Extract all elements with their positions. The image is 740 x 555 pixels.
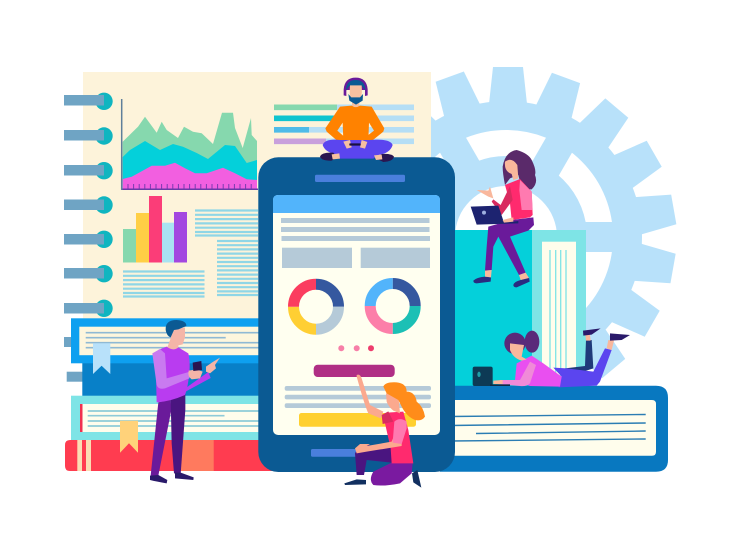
pagination dots [338, 345, 374, 351]
phone speaker [315, 175, 405, 182]
book: top left stack, blue [64, 318, 272, 396]
laptop [473, 367, 510, 386]
icon: gear [350, 67, 677, 404]
book: middle left stack, teal [71, 396, 271, 441]
lower text lines [285, 386, 431, 408]
spiral binding rings [64, 93, 113, 317]
purple button [314, 365, 395, 377]
book: large blue book, right [440, 386, 668, 472]
icon: yellow bookmark [120, 421, 138, 453]
figure: meditating man with headphones [320, 78, 394, 162]
phone screen [273, 195, 440, 435]
panel: notebook page [83, 72, 431, 332]
figure: woman lying on book [473, 328, 630, 387]
yellow button [299, 413, 416, 427]
phone home bar [311, 449, 371, 457]
figure: woman sitting with laptop [471, 150, 536, 287]
icon: blue bookmark [93, 343, 110, 374]
screen image blocks [282, 248, 430, 268]
text lines: lower right of notebook [217, 241, 258, 295]
figure: kneeling woman touching screen [344, 375, 425, 488]
area chart [122, 99, 258, 190]
screen header [273, 195, 440, 213]
figure: standing man with phone [150, 320, 220, 483]
panel: smartphone [258, 157, 455, 472]
bar chart [123, 196, 187, 262]
screen text lines [281, 218, 430, 241]
donut chart: right [370, 284, 415, 328]
legend bars: top right of notebook [274, 104, 414, 144]
text lines: under bar chart [123, 272, 204, 296]
book: standing teal book [440, 230, 586, 390]
text lines: beside bar chart [195, 210, 258, 236]
book: bottom left stack, red [65, 421, 275, 471]
donut chart: left [294, 284, 338, 329]
